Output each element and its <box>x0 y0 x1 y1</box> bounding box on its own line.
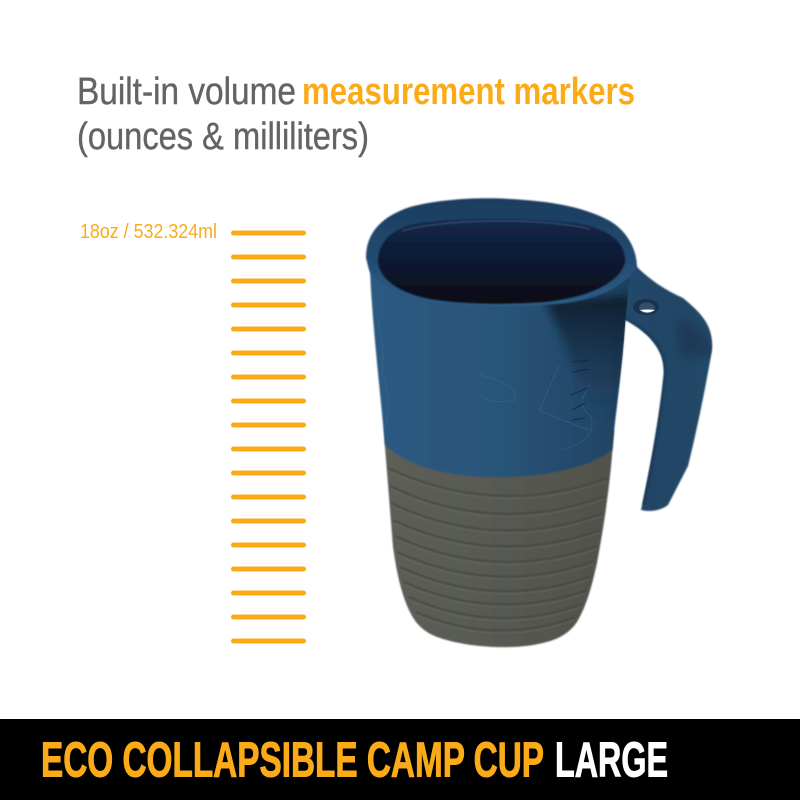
cup ribs <box>388 468 608 630</box>
heading <box>77 71 635 158</box>
handle-side shadow on body <box>544 292 628 410</box>
banner title: ECO COLLAPSIBLE CAMP CUP <box>41 734 544 788</box>
bottom banner <box>0 719 800 800</box>
rib highlights <box>388 471 608 633</box>
cup handle <box>625 266 714 512</box>
handle hole <box>633 299 659 315</box>
handle bend shading <box>677 318 713 358</box>
banner title: LARGE <box>555 734 668 788</box>
heading line 1 <box>77 71 635 113</box>
volume label: 18oz / 532.324ml <box>80 221 217 243</box>
cup gray base <box>384 425 614 647</box>
heading line 2: (ounces & milliliters) <box>77 116 369 158</box>
measurement markers <box>231 230 306 644</box>
cup opening <box>378 219 625 304</box>
engraved marks <box>570 360 590 420</box>
cup illustration <box>366 198 713 647</box>
handle inner edge highlight <box>575 304 665 505</box>
cup rim <box>366 198 637 306</box>
cup blue body <box>370 270 630 477</box>
topographic texture <box>378 320 592 450</box>
heading line 1: measurement markers <box>302 71 635 113</box>
heading line 1: Built-in volume <box>77 71 296 113</box>
banner background <box>0 719 800 800</box>
inner rim highlight <box>402 221 590 231</box>
